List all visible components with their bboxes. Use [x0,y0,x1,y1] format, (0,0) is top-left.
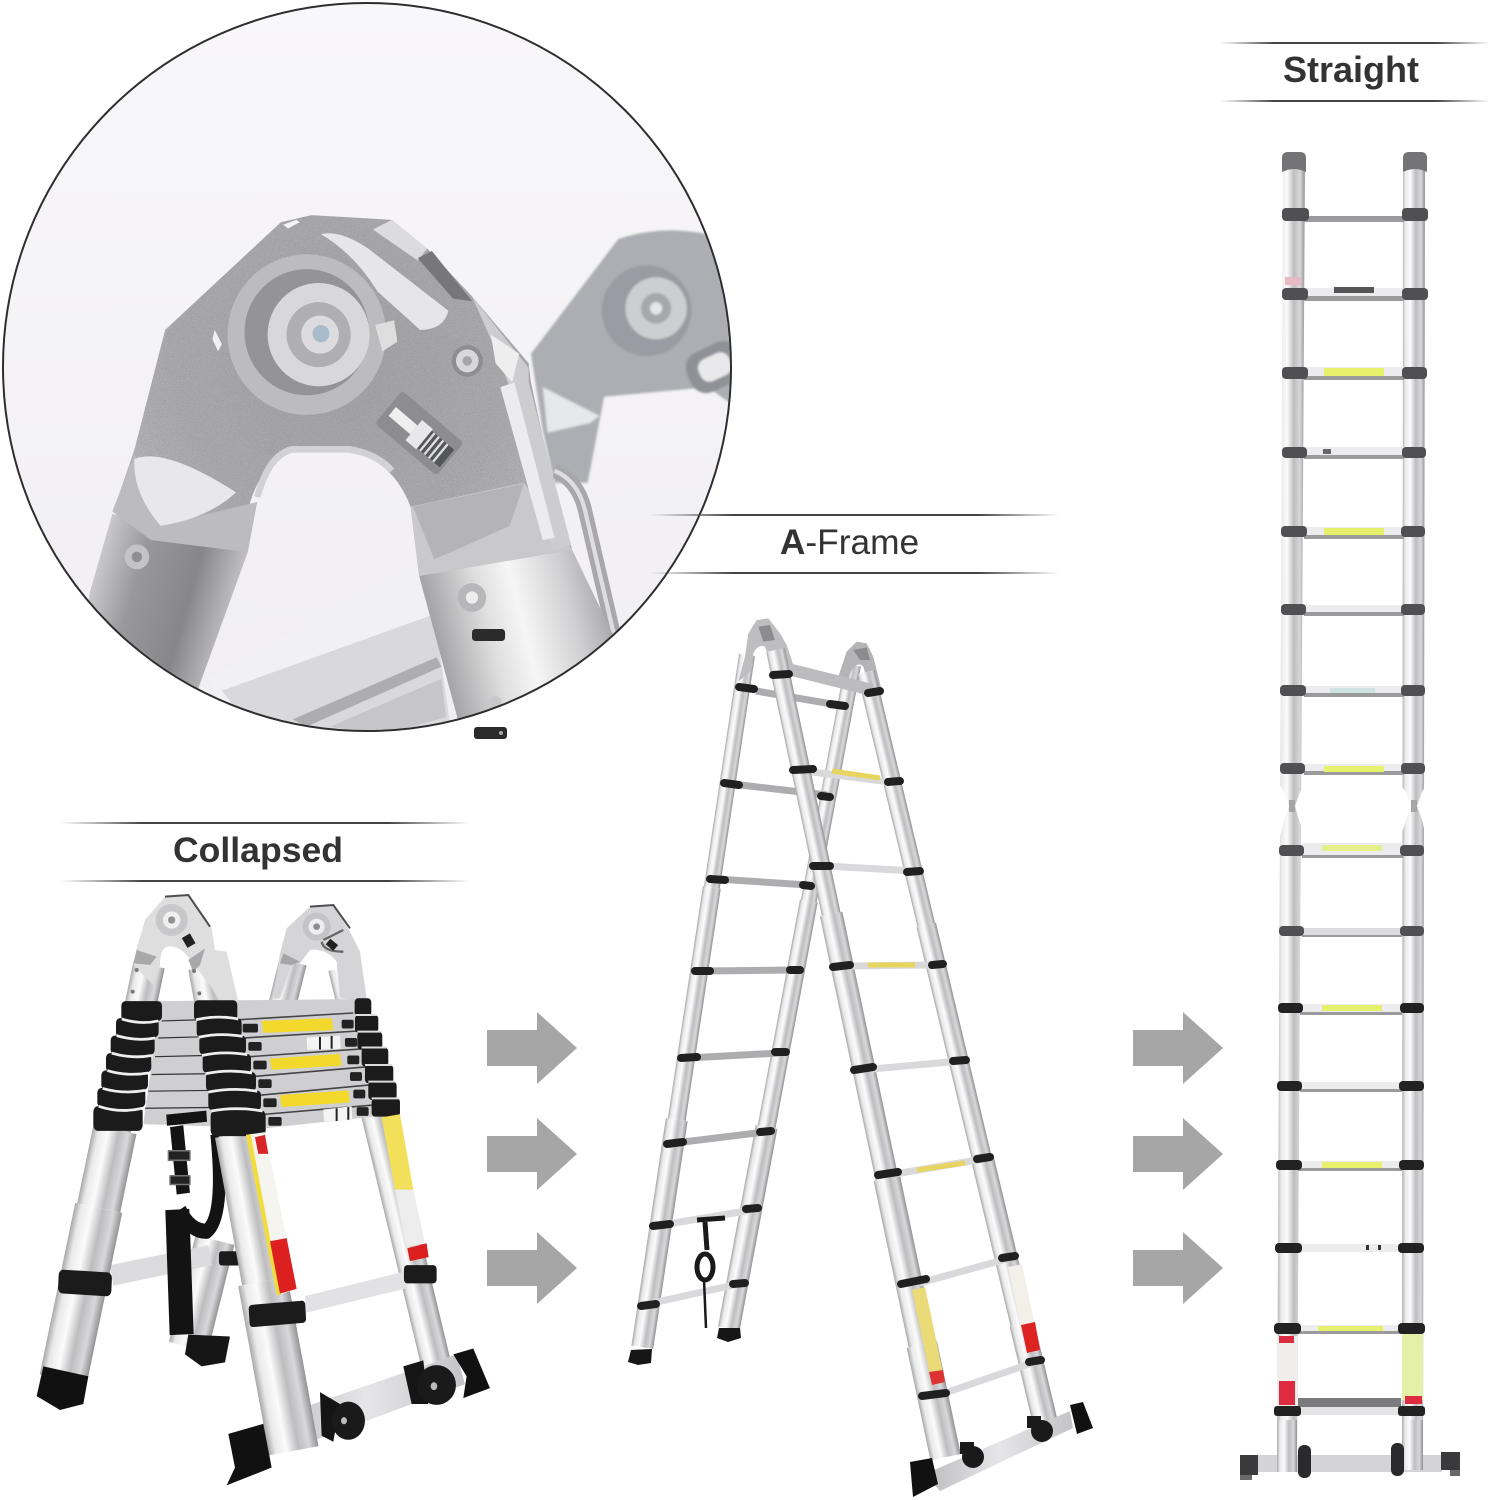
a-frame: front rungs [792,670,1035,1393]
a-frame: rear rails [631,653,864,1349]
straight: top caps [1282,152,1427,172]
collapsed: lower rear rung [110,1245,212,1286]
collapsed: black rubber feet [37,1348,490,1485]
close-up: pivot disc [212,233,448,415]
straight: rail labels [1277,277,1423,1406]
collapsed: wheels [320,1360,456,1442]
arrows: collapsed to A-frame [487,1012,577,1304]
heading: Straight: Straight [1283,49,1419,90]
close-up: blurred rear hinge [531,230,750,483]
close-up: left tube [88,514,248,688]
a-frame: warning labels [912,1264,1040,1385]
collapsed: front hinge [131,895,238,1002]
close-up: spring latch [375,391,464,476]
collapsed: lower collars [58,1265,437,1327]
straight: centre hinge necks [1278,782,1428,845]
arrows: A-frame to straight [1133,1012,1223,1304]
collapsed: left collar stack [93,1001,162,1131]
close-up: wire handle [555,471,614,633]
straight: end feet [1240,1452,1460,1480]
collapsed: rear black foot [185,1335,230,1366]
a-frame: rear rubber feet [628,1328,741,1365]
collapsed: front lower rung [305,1271,407,1313]
close-up: bolt [452,345,483,377]
straight: stabiliser bar [1257,1455,1442,1472]
collapsed: rear tubes [169,959,450,1365]
heading: Collapsed: Collapsed [173,830,343,870]
a-frame: wheels [960,1416,1053,1468]
close-up: circle outline [3,3,731,731]
straight: rails over bar [1277,1420,1423,1472]
close-up: hinge casting [112,215,572,576]
close-up: ladder plate in background [222,616,450,730]
a-frame: rear rungs [648,691,832,1304]
straight: rails [1277,160,1425,1470]
a-frame: black feet [910,1402,1093,1497]
a-frame: carry strap [697,1218,725,1328]
panel: circular close-up of hinge joint [3,3,750,746]
collapsed: rear hinge [273,905,367,1000]
collapsed: stacked rung plates [143,999,397,1128]
collapsed: carry strap [167,1116,219,1335]
a-frame: front rails [760,647,1059,1460]
panel: A-frame ladder [628,618,1093,1497]
a-frame: rear hinge [838,642,882,690]
straight: wheels [1298,1443,1404,1478]
a-frame: rear collars [641,687,845,1306]
collapsed: rear tube collar [219,1251,242,1265]
collapsed: front tubes [40,960,318,1453]
a-frame: front hinge [738,618,795,682]
collapsed: centre collar stack [194,1000,266,1136]
collapsed: right collar stack [355,998,400,1117]
close-up: clip outside the circle [474,727,507,739]
panel: collapsed ladder [37,895,490,1485]
a-frame: front collars [773,674,1041,1396]
collapsed: front tube over bar [253,1356,318,1455]
straight: rungs [1297,216,1404,1415]
straight: collars [1274,208,1428,1416]
collapsed: warning labels on rails [246,1114,429,1295]
panel: straight ladder [1240,152,1460,1480]
a-frame: stabiliser bar [925,1411,1073,1491]
close-up: right tube [419,550,613,718]
heading: A-Frame: A-Frame [780,523,919,562]
collapsed: bottom stabiliser bar [265,1354,465,1454]
